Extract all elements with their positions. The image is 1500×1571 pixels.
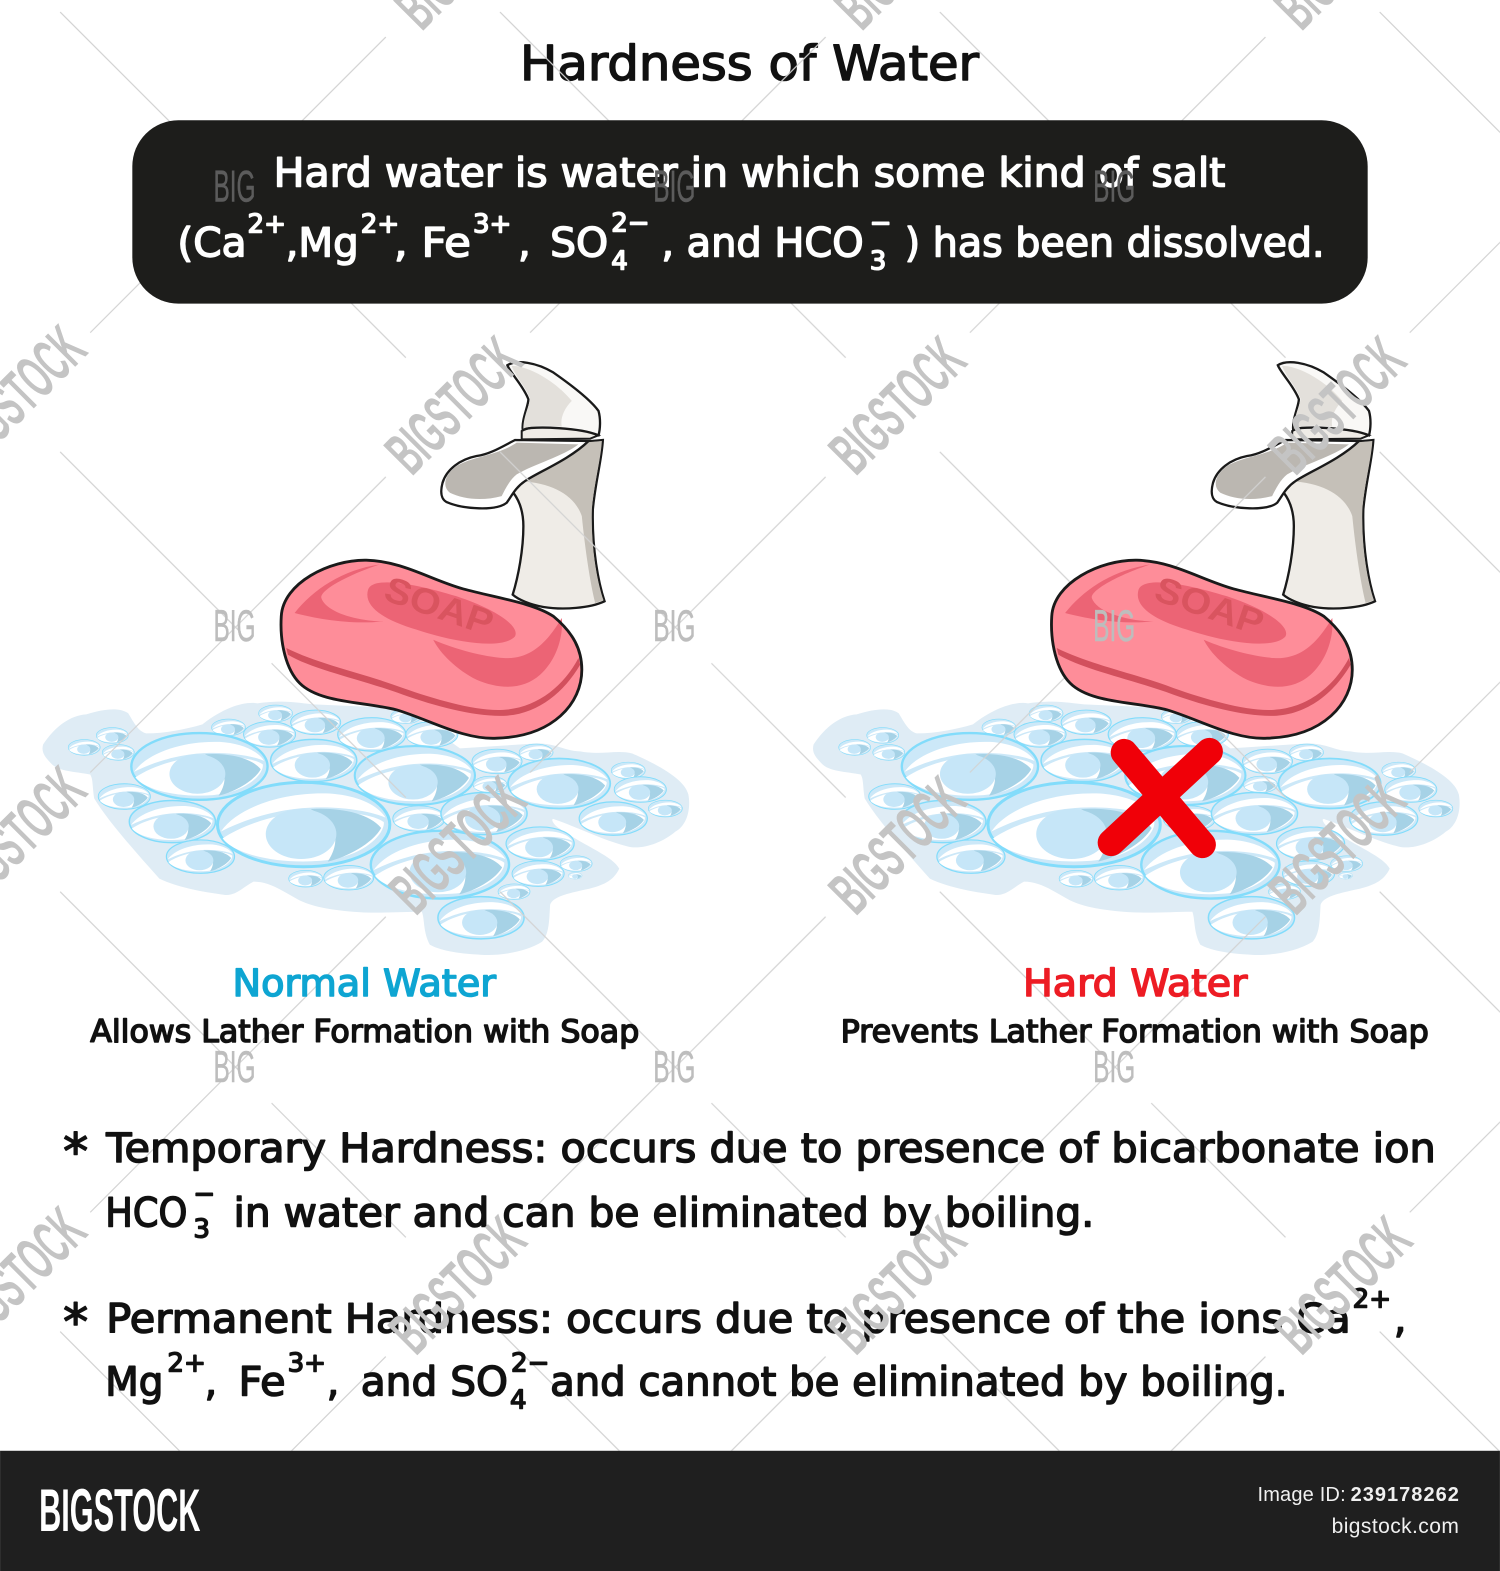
watermarks: BIG [213, 1043, 256, 1092]
banner: definition of hard water: 2− [611, 208, 650, 238]
illustration: faucet, hard water [1212, 362, 1375, 608]
banner: definition of hard water: − [870, 208, 892, 238]
banner: definition of hard water [132, 120, 1368, 304]
note: temporary hardness: − [193, 1179, 215, 1209]
watermarks: BIG [653, 162, 695, 211]
banner: definition of hard water: ) has been dissolved. [905, 220, 1325, 266]
note: permanent hardness: 4 [510, 1386, 527, 1416]
illustration: lather bubbles, hard water [813, 702, 1460, 955]
illustration: lather bubbles, normal water [43, 702, 689, 955]
soap bar: hard water [1051, 560, 1352, 738]
watermarks: BIGSTOCK [817, 1204, 979, 1367]
watermarks: BIG [213, 602, 256, 651]
watermarks: BIG [1093, 602, 1135, 651]
caption: hard water [841, 962, 1429, 1050]
note: temporary hardness: in water and can be eliminated by boiling. [234, 1190, 1094, 1236]
note: permanent hardness: , [327, 1360, 339, 1406]
note: permanent hardness: Mg [105, 1360, 163, 1406]
banner: definition of hard water: 2+ [361, 209, 399, 239]
watermarks: BIG [213, 162, 256, 211]
note: permanent hardness: and cannot be eliminated by boiling. [550, 1360, 1288, 1406]
note: permanent hardness: * [63, 1294, 88, 1352]
footer logo: BIGSTOCK [39, 1477, 200, 1544]
note: temporary hardness: HCO [105, 1190, 187, 1236]
note: permanent hardness [63, 1284, 1406, 1416]
soap bar: normal water [281, 560, 582, 738]
footer bar [0, 1451, 1500, 1571]
watermarks: BIGSTOCK [817, 765, 979, 927]
soap bar: hard water: SOAP [1150, 568, 1269, 643]
banner: definition of hard water: , and HCO [661, 220, 864, 266]
banner: definition of hard water: ,Mg [286, 220, 359, 266]
footer image id [1257, 1484, 1459, 1538]
banner: definition of hard water: (Ca [177, 220, 247, 266]
banner: definition of hard water: 3 [870, 247, 886, 277]
banner: definition of hard water: , Fe [394, 220, 471, 266]
note: permanent hardness: , [204, 1360, 217, 1406]
banner: definition of hard water: Hard water is water in which some kind of salt [274, 150, 1225, 196]
banner: definition of hard water: SO [550, 220, 608, 266]
banner: definition of hard water: 2+ [248, 209, 286, 239]
note: permanent hardness: 2+ [167, 1349, 206, 1379]
footer image id: 239178262 [1351, 1484, 1459, 1506]
note: permanent hardness: , [1394, 1297, 1406, 1343]
footer image id: bigstock.com [1332, 1515, 1459, 1538]
note: temporary hardness: 3 [193, 1214, 210, 1244]
watermarks: BIGSTOCK [817, 325, 979, 487]
note: permanent hardness: 2+ [1353, 1284, 1391, 1314]
note: temporary hardness: Temporary Hardness: occurs due to presence of bicarbonate ion [105, 1126, 1436, 1172]
watermarks: BIGSTOCK [377, 1204, 539, 1367]
note: permanent hardness: and SO [361, 1360, 508, 1406]
watermarks: BIG [653, 1043, 695, 1092]
illustration: faucet, normal water [441, 362, 605, 608]
note: temporary hardness [63, 1123, 1436, 1244]
note: temporary hardness: * [63, 1123, 88, 1181]
caption: hard water: Prevents Lather Formation with Soap [841, 1014, 1429, 1050]
caption: hard water: Hard Water [1023, 962, 1248, 1005]
watermarks: BIGSTOCK [373, 325, 535, 487]
note: permanent hardness: Permanent Hardness: occurs due to presence of the ions Ca [106, 1297, 1351, 1343]
watermarks: BIG [1093, 162, 1135, 211]
watermarks: BIG [653, 602, 695, 651]
icon: red cross [1111, 751, 1209, 845]
note: permanent hardness: 3+ [288, 1349, 326, 1379]
soap bar: normal water: SOAP [379, 568, 499, 643]
caption: normal water: Allows Lather Formation with Soap [90, 1014, 639, 1050]
note: permanent hardness: 2− [511, 1349, 549, 1379]
watermarks: BIGSTOCK [377, 765, 539, 927]
caption: normal water [90, 962, 639, 1050]
watermarks: BIG [1093, 1043, 1135, 1092]
footer image id: Image ID: [1257, 1484, 1346, 1506]
title: Hardness of Water [520, 36, 979, 92]
note: permanent hardness: Fe [239, 1360, 286, 1406]
banner: definition of hard water: 4 [611, 247, 628, 277]
banner: definition of hard water: , [518, 220, 531, 266]
caption: normal water: Normal Water [233, 962, 497, 1005]
banner: definition of hard water: 3+ [473, 209, 511, 239]
